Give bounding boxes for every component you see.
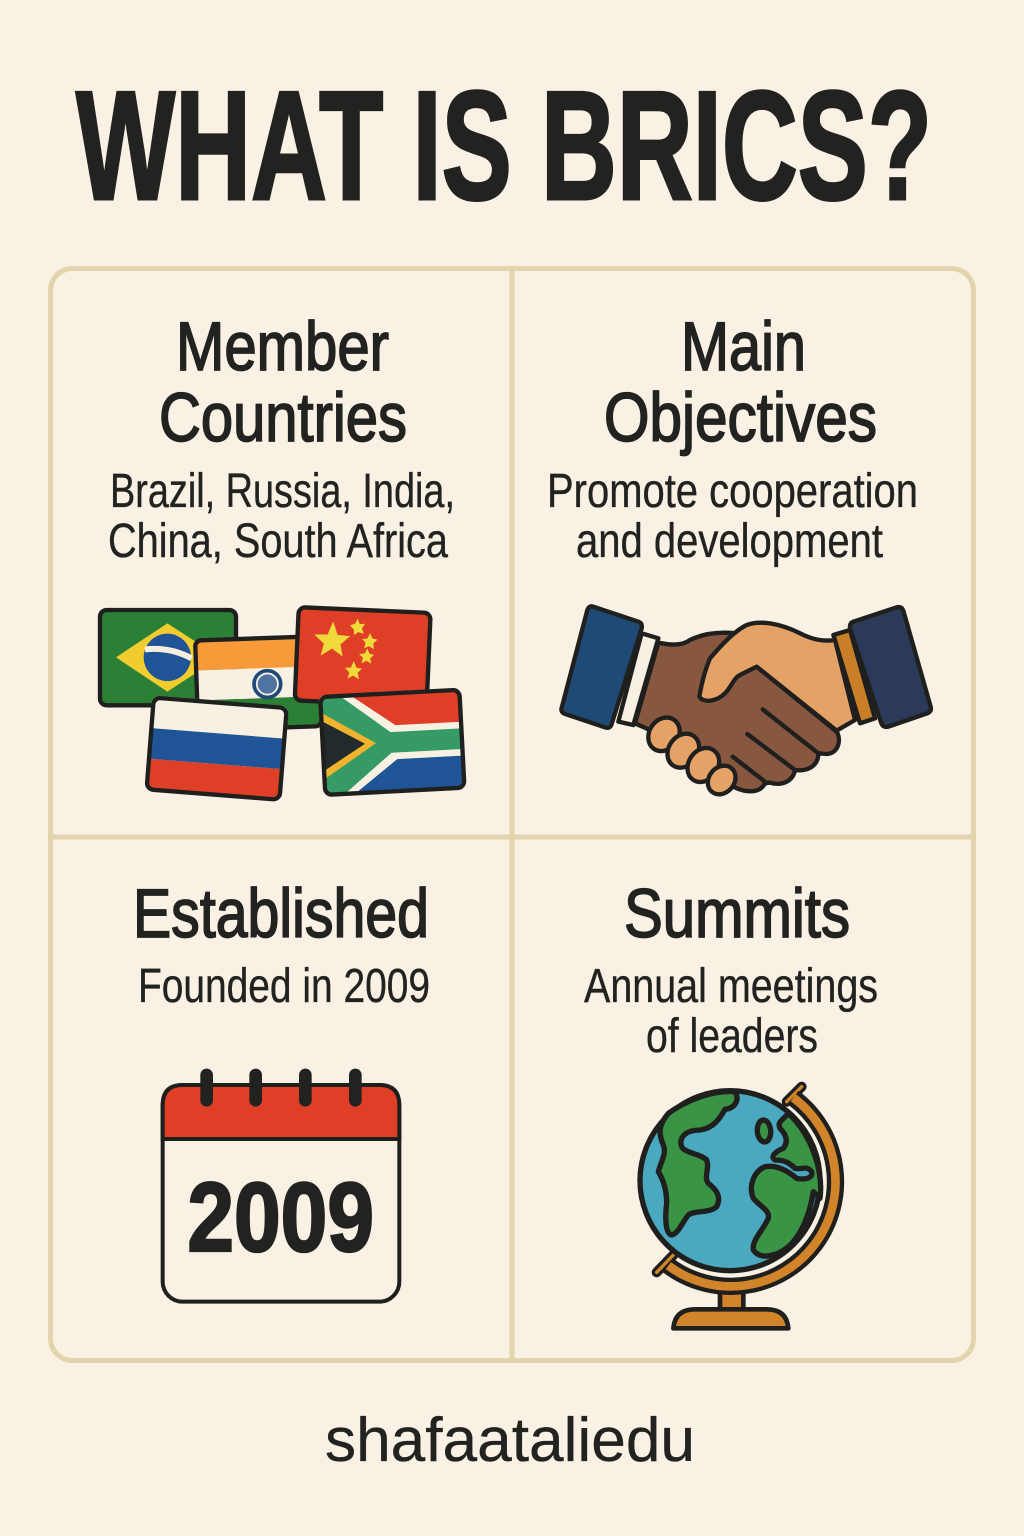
icon: handshake: [561, 606, 931, 800]
panel grid: [50, 268, 974, 1360]
heading: member countries: [159, 308, 407, 456]
globe axis pins: [657, 1087, 802, 1272]
continent: left: [658, 1091, 737, 1235]
heading: summits: Summits: [624, 875, 850, 952]
calendar header: [163, 1085, 399, 1139]
icon: calendar: [163, 1069, 399, 1302]
light hand: [699, 623, 855, 731]
flag: China: [295, 607, 431, 706]
right sleeve: [850, 607, 931, 727]
flag: South Africa: [318, 688, 467, 797]
left sleeve: [561, 606, 642, 728]
calendar year: 2009: [187, 1162, 374, 1272]
finger creases: [733, 709, 818, 782]
globe sphere: [640, 1091, 820, 1271]
heading: main objectives: Objectives: [604, 379, 877, 456]
text: summits description: of leaders: [646, 1010, 818, 1063]
right shirt cuff: [833, 630, 875, 723]
heading: main objectives: [604, 308, 877, 456]
text: member list: [108, 465, 455, 568]
text: objectives: Promote cooperation: [547, 465, 918, 518]
brown hand: [635, 633, 839, 791]
heading: member countries: Member: [176, 308, 389, 385]
left shirt cuff: [618, 633, 658, 725]
lake: [756, 1119, 772, 1143]
continent: right upper: [751, 1113, 821, 1256]
flag: Russia: [144, 695, 289, 802]
flag: Brazil: [100, 610, 236, 705]
text: member list: Brazil, Russia, India,: [110, 465, 455, 518]
text: summits description: [584, 960, 878, 1063]
fingers: [642, 711, 741, 800]
heading: member countries: Countries: [159, 379, 407, 456]
text: member list: China, South Africa: [108, 515, 448, 568]
heading: main objectives: Main: [681, 308, 806, 385]
calendar page: [163, 1085, 399, 1302]
text: summits description: Annual meetings: [584, 960, 878, 1013]
panel: summits: [584, 875, 878, 1328]
globe stand: [720, 1290, 743, 1310]
panel: member countries: [100, 308, 467, 802]
footer credit: shafaataliedu: [325, 1406, 695, 1475]
flag: India: [195, 636, 322, 730]
continents: [658, 1091, 821, 1256]
text: objectives: [547, 465, 918, 568]
text: founded: Founded in 2009: [138, 960, 430, 1013]
panel: main objectives: [547, 308, 931, 800]
panel: established: [133, 875, 430, 1302]
icon: five flags: [100, 607, 467, 802]
icon: globe: [640, 1087, 836, 1328]
heading: established: Established: [133, 875, 429, 952]
calendar rings: [200, 1069, 362, 1107]
text: objectives: and development: [576, 515, 883, 568]
globe arc: [668, 1098, 836, 1286]
